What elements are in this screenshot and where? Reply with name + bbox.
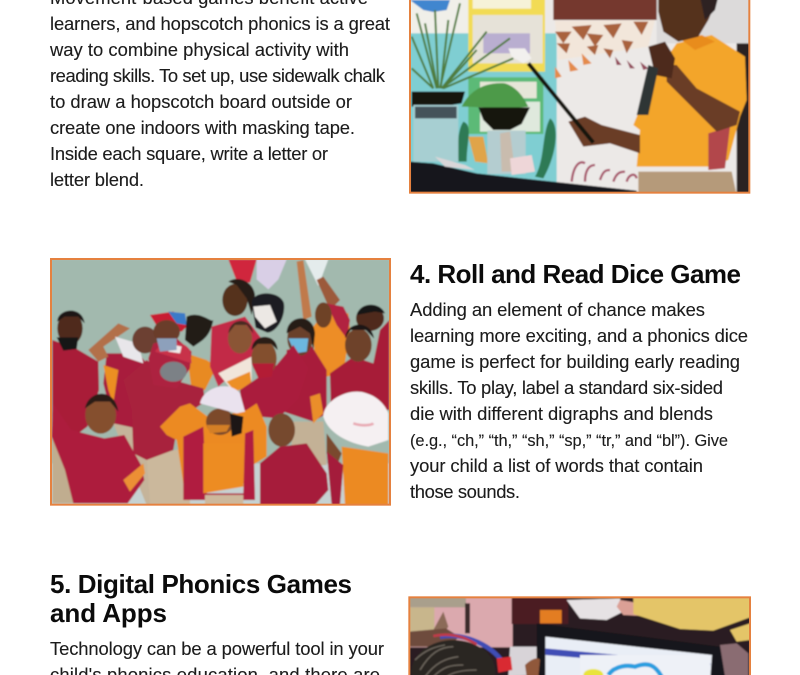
heading: digital phonics games and apps: 5. Digital Phonics Games bbox=[50, 569, 352, 599]
text block: hopscotch phonics description: to draw a hopscotch board outside or bbox=[50, 91, 352, 112]
text block: hopscotch phonics description: way to combine physical activity with bbox=[49, 39, 349, 60]
heading: digital phonics games and apps bbox=[50, 569, 352, 628]
text block: dice game description bbox=[410, 299, 748, 502]
text block: digital games description bbox=[50, 638, 384, 675]
text block: dice game description: your child a list of words that contain bbox=[410, 455, 703, 476]
text block: dice game description: game is perfect for building early reading bbox=[410, 351, 740, 372]
text block: dice game description: skills. To play, label a standard six-sided bbox=[410, 377, 723, 398]
text block: dice game description: (e.g., “ch,” “th,” “sh,” “sp,” “tr,” and “bl”). Give bbox=[410, 432, 728, 450]
text block: hopscotch phonics description bbox=[49, 0, 390, 190]
photo: student presenting a science project with a microphone bbox=[410, 0, 750, 196]
text block: hopscotch phonics description: letter blend. bbox=[50, 169, 144, 190]
photo: group of students in red and orange uniforms saluting bbox=[51, 259, 390, 505]
text block: dice game description: die with different digraphs and blends bbox=[410, 403, 713, 424]
heading: roll and read dice game: 4. Roll and Read Dice Game bbox=[410, 259, 741, 289]
photo: child with braids using a tablet bbox=[409, 597, 750, 675]
text block: dice game description: Adding an element of chance makes bbox=[410, 299, 705, 320]
text block: hopscotch phonics description: Inside each square, write a letter or bbox=[50, 143, 328, 164]
text block: hopscotch phonics description: reading skills. To set up, use sidewalk chalk bbox=[50, 65, 386, 86]
text block: dice game description: learning more exciting, and a phonics dice bbox=[410, 325, 748, 346]
text block: digital games description: Technology can be a powerful tool in your bbox=[50, 638, 384, 659]
heading: digital phonics games and apps: and Apps bbox=[50, 598, 167, 628]
text block: hopscotch phonics description: learners, and hopscotch phonics is a great bbox=[50, 13, 390, 34]
text block: dice game description: those sounds. bbox=[410, 481, 520, 502]
text block: hopscotch phonics description: create one indoors with masking tape. bbox=[50, 117, 355, 138]
